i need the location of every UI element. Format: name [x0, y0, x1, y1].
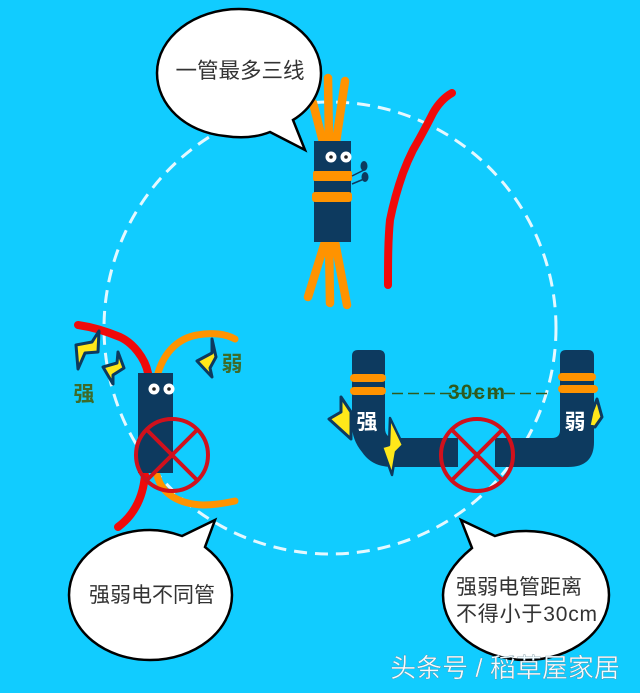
red wire: [388, 93, 452, 285]
watermark: 头条号 / 稻草屋家居: [390, 653, 620, 683]
label: weak: 弱: [222, 353, 242, 376]
callout: one conduit: 一管最多三线: [175, 59, 305, 83]
eyes: [148, 384, 174, 394]
cable tie knot: [352, 161, 368, 184]
conduit: [138, 373, 173, 473]
conduit bands: [312, 171, 352, 202]
callout: minimum distance: 强弱电管距离: [456, 576, 582, 599]
strong conduit: [352, 350, 458, 467]
orange wires bottom: [308, 242, 347, 305]
icon: lightning bolt: [382, 418, 403, 475]
red wire top: [78, 325, 148, 373]
icon: lightning bolt: [76, 331, 99, 369]
icon: lightning bolt: [589, 399, 602, 427]
distance label: 30cm: [448, 381, 505, 404]
callout: minimum distance: [443, 520, 609, 660]
icon: lightning bolt: [197, 339, 216, 377]
panel: one conduit at most three wires: [308, 78, 452, 305]
panel: strong and weak not in same conduit: [74, 325, 242, 527]
label: weak: 弱: [564, 411, 586, 434]
strong conduit bands: [350, 374, 386, 395]
distance line: [392, 392, 550, 394]
callout: not in same conduit: [69, 520, 232, 660]
orange wire top: [158, 334, 235, 373]
callout: not in same conduit: 强弱电不同管: [89, 584, 215, 607]
label: strong: 强: [74, 383, 94, 406]
callout: one conduit: [157, 9, 321, 150]
label: strong: 强: [356, 411, 378, 434]
red wire bottom: [118, 475, 145, 527]
callout: minimum distance: 不得小于30cm: [456, 603, 597, 626]
weak conduit bands: [558, 373, 598, 393]
panel: conduits at least 30cm apart: [329, 350, 602, 491]
orange wires top: [313, 78, 345, 142]
icon: lightning bolt: [103, 352, 124, 384]
icon: prohibited: [441, 419, 513, 491]
icon: prohibited: [136, 419, 208, 491]
conduit: [314, 141, 351, 242]
icon: lightning bolt: [329, 397, 351, 439]
orange wire bottom: [157, 475, 235, 505]
weak conduit: [495, 350, 594, 467]
eyes: [326, 152, 352, 162]
